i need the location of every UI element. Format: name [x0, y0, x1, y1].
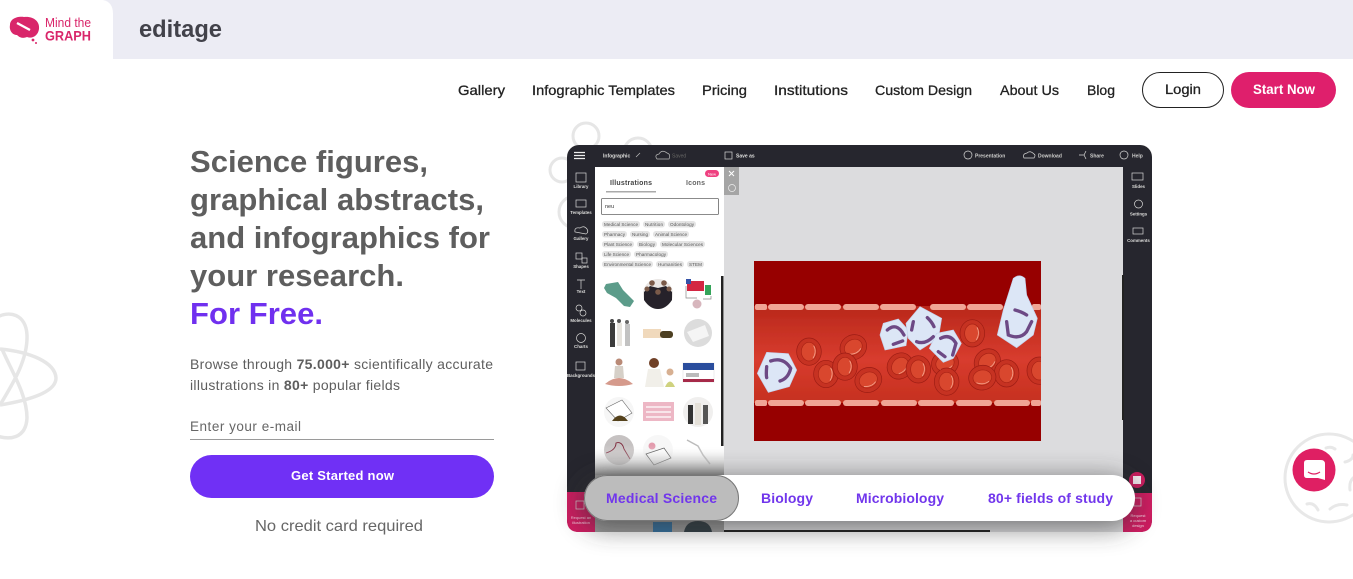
navigation: Infographic Templates [532, 82, 675, 98]
panel close tab [724, 167, 739, 195]
category tags: Plant Science [604, 242, 632, 247]
thumbnail: doctors [610, 319, 630, 347]
illustration thumbnails [604, 279, 714, 465]
category tags: Nutrition [645, 222, 663, 227]
left sidebar: Library [574, 184, 589, 189]
top toolbar: Presentation [975, 154, 1005, 160]
right sidebar: Slides [1132, 184, 1146, 189]
top toolbar: Download [1038, 154, 1062, 160]
button: get started: Get Started now [291, 468, 395, 483]
mockup frame [567, 145, 1152, 532]
chat button [1292, 448, 1336, 492]
button: login: Login [1165, 81, 1201, 97]
thumbnail: devices [686, 279, 711, 308]
tabs: Icons [686, 180, 705, 187]
headline [190, 144, 490, 331]
thumbnail: doctor and child [645, 358, 675, 387]
thumbnail: gloves [604, 282, 634, 307]
category tags: STEM [689, 262, 702, 267]
navigation: About Us [1000, 82, 1059, 98]
search box: neu [605, 204, 614, 210]
top toolbar: Save as [736, 154, 755, 160]
headline: graphical abstracts, [190, 182, 484, 217]
top toolbar: Help [1132, 154, 1143, 160]
panel bottom fade [595, 445, 724, 475]
navigation: Blog [1087, 82, 1115, 98]
email input: Enter your e-mail [190, 419, 301, 434]
category tags: Medical Science [604, 222, 638, 227]
left sidebar: Gallery [574, 236, 589, 241]
headline: Science figures, [190, 144, 428, 179]
category tags: Animal Science [655, 232, 687, 237]
category tags: Odontology [670, 222, 695, 227]
app mockup [567, 145, 1152, 532]
logo: Mind the Graph: GRAPH [45, 28, 91, 44]
category selector: Microbiology [856, 490, 944, 506]
icon: brain [10, 17, 39, 44]
thumbnail: prescription [604, 397, 634, 427]
top bar [0, 0, 1353, 59]
thumbnail: document [683, 363, 714, 382]
left sidebar: Text [577, 289, 586, 294]
thumbnail: id tag [643, 435, 673, 465]
thumbnail: professionals [683, 397, 713, 427]
panel: illustrations [595, 167, 739, 532]
left sidebar: Shapes [573, 264, 589, 269]
background decoration: cell [1285, 434, 1353, 522]
red blood cells [797, 320, 1052, 397]
top toolbar: Infographic [603, 154, 630, 160]
category tags: Environmental Science [604, 262, 651, 267]
category selector: 80+ fields of study [988, 490, 1113, 506]
left sidebar: Templates [570, 210, 592, 215]
navigation [458, 82, 1115, 98]
request illustration block: Request an [571, 515, 591, 520]
headline: your research. [190, 258, 404, 293]
request custom design block: a custom [1130, 518, 1147, 523]
request illustration block: illustration [572, 520, 590, 525]
logo: Mind the Graph [10, 16, 91, 44]
category selector: Medical Science [606, 490, 717, 506]
tabs: Illustrations [610, 180, 652, 187]
category tags: Pharmacology [636, 252, 667, 257]
category selector [584, 475, 1135, 521]
canvas scrollbar [1122, 275, 1124, 420]
white logo tab [0, 0, 113, 59]
request custom design block: Request [1131, 513, 1146, 518]
button: login [1142, 72, 1224, 108]
thumbnail: mouse [687, 440, 710, 464]
note: no credit card: No credit card required [255, 518, 423, 535]
right sidebar: Settings [1130, 212, 1148, 216]
top toolbar: Share [1090, 154, 1104, 160]
partial thumbnails [653, 521, 712, 532]
left sidebar [567, 173, 596, 378]
category tags [602, 221, 705, 268]
left sidebar: Molecules [570, 318, 592, 323]
request illustration block [567, 492, 595, 532]
bottom timeline bar [724, 530, 990, 532]
thumbnail: vial [643, 329, 673, 338]
tabs: New [708, 172, 716, 176]
vessel walls [755, 304, 1041, 406]
logo: Mind the Graph: Mind the [45, 16, 91, 30]
canvas area [724, 167, 1123, 532]
logo: editage: editage [139, 16, 222, 43]
thumbnail: pink chart [643, 402, 674, 421]
left sidebar: Backgrounds [567, 373, 596, 378]
description [190, 356, 493, 393]
search box [602, 198, 718, 214]
description: Browse through 75.000+ scientifically accurate [190, 356, 493, 372]
right sidebar: Comments [1127, 238, 1150, 243]
category selector: Biology [761, 490, 813, 506]
category tags: Pharmacy [604, 232, 626, 237]
headline: and infographics for [190, 220, 490, 255]
top toolbar: Saved [672, 154, 686, 160]
background decoration: atom [0, 314, 56, 438]
tabs [606, 170, 719, 192]
navigation: Pricing [702, 82, 747, 98]
request custom design block: design [1132, 523, 1144, 528]
icon: chat bubble [1304, 460, 1325, 480]
category tags: Molecular Sciences [662, 242, 704, 247]
category tags: Nursing [632, 232, 648, 237]
headline: For Free. [190, 296, 323, 331]
right sidebar [1127, 173, 1150, 243]
pill shadow [580, 478, 1135, 528]
thumbnail: meditation [605, 358, 633, 386]
background decoration: bubbles [550, 123, 652, 228]
thumbnail: paper [684, 319, 712, 347]
description: illustrations in 80+ popular fields [190, 377, 400, 393]
button: start now [1231, 72, 1336, 108]
button: get started [190, 455, 494, 498]
navigation: Custom Design [875, 82, 972, 98]
navigation: Gallery [458, 82, 505, 98]
category tags: Biology [639, 242, 656, 247]
panel scrollbar [721, 276, 724, 446]
left sidebar: Charts [574, 344, 589, 349]
illustration: blood vessel [754, 261, 1052, 441]
thumbnail: team [643, 279, 673, 309]
white blood cells [757, 276, 1037, 392]
request custom design block [1123, 493, 1152, 532]
category tags: Humanities [658, 262, 683, 267]
navigation: Institutions [774, 82, 848, 98]
pink circle button [1129, 472, 1145, 488]
button: start now: Start Now [1253, 81, 1315, 97]
icon: menu [574, 152, 585, 158]
top toolbar [574, 151, 1143, 160]
selected pill [584, 476, 738, 520]
category tags: Life Science [604, 252, 629, 257]
thumbnail: stethoscope [604, 435, 634, 465]
